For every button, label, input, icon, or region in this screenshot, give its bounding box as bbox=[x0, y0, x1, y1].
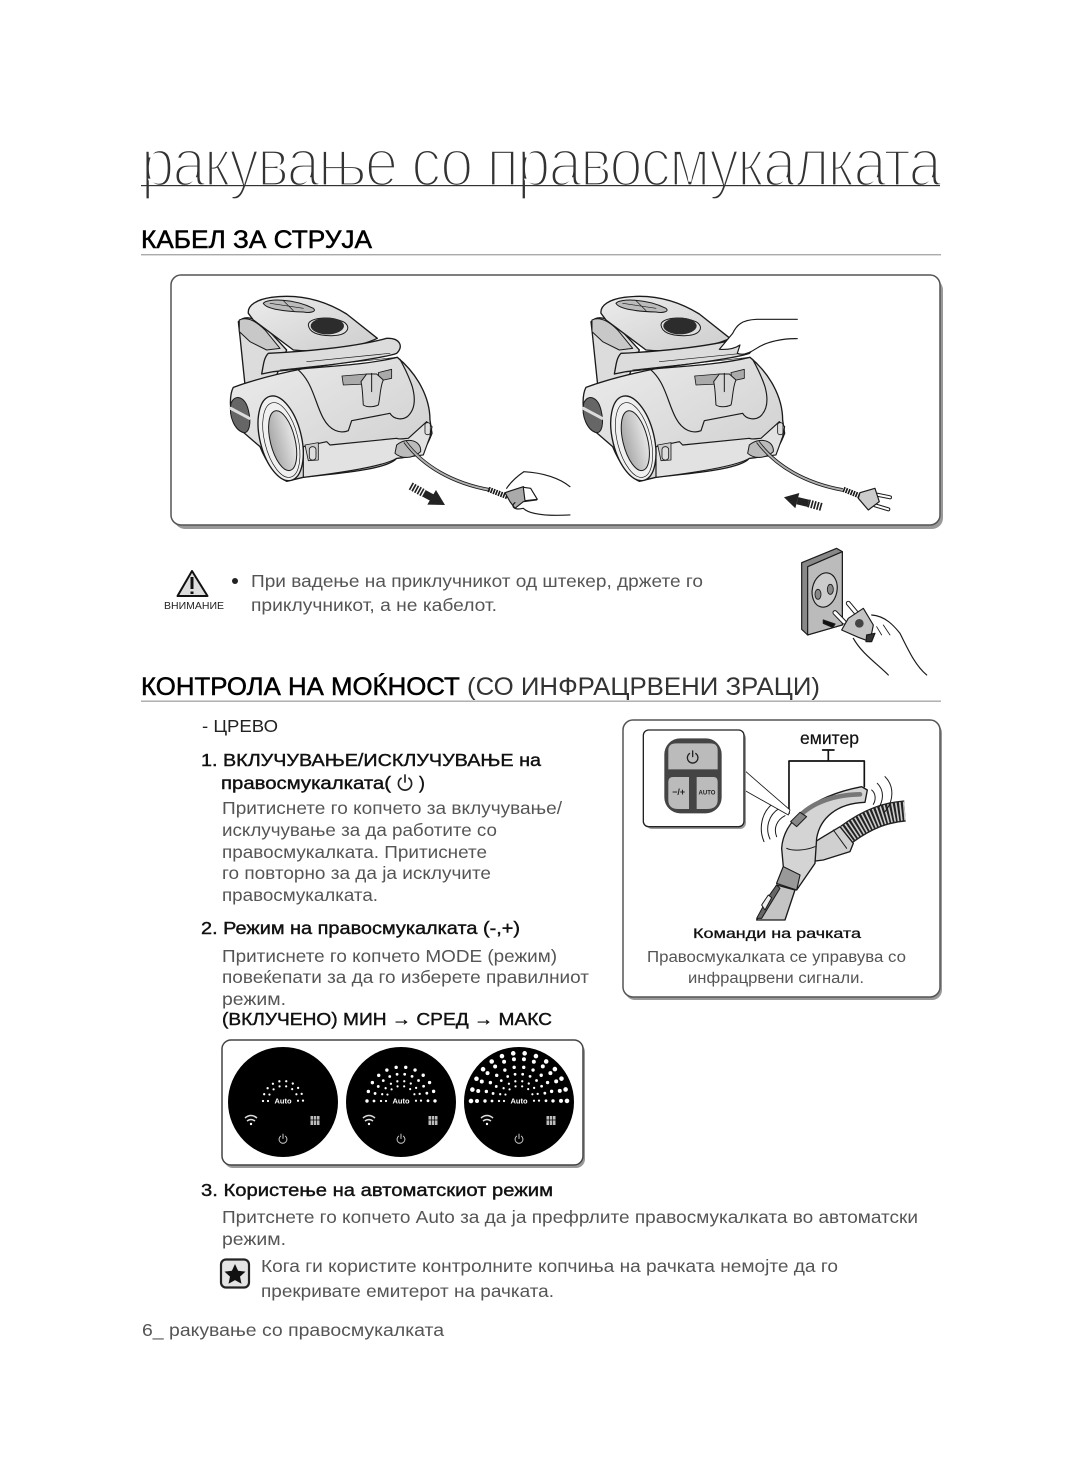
caption text: инфрацрвени сигнали. bbox=[688, 970, 864, 987]
icon: warning triangle bbox=[178, 571, 208, 596]
step 3 text: режим. bbox=[222, 1229, 286, 1249]
step 3 text bbox=[222, 1207, 918, 1249]
illustration: hose handle with emitters bbox=[744, 750, 905, 920]
panel: handle controls bbox=[623, 720, 942, 1000]
step 1 text: го повторно за да ја исклучите bbox=[222, 863, 491, 883]
text block: hose controls bbox=[201, 716, 589, 1029]
note text: Кога ги користите контролните копчиња на рачката немојте да го bbox=[261, 1256, 838, 1276]
page footer: 6_ ракување со правосмукалката bbox=[142, 1320, 444, 1341]
step 1 text: Притиснете го копчето за вклучување/ bbox=[222, 798, 562, 818]
note text bbox=[261, 1256, 838, 1301]
step 2 text: режим. bbox=[222, 989, 286, 1009]
warning text bbox=[232, 571, 703, 615]
warning text: При вадење на приклучникот од штекер, држете го bbox=[251, 571, 703, 591]
step 1 text: исклучување за да работите со bbox=[222, 820, 497, 840]
label: warning: ВНИМАНИЕ bbox=[164, 600, 224, 612]
note text: прекривате емитерот на рачката. bbox=[261, 1281, 554, 1301]
illustration: vacuum with cord pulled out bbox=[230, 296, 570, 515]
panel: suction level displays bbox=[222, 1040, 585, 1168]
step 1 text bbox=[222, 798, 562, 905]
caption text bbox=[647, 949, 906, 987]
step 1 text: правосмукалката. bbox=[222, 885, 378, 905]
display: medium: Auto bbox=[392, 1096, 410, 1106]
inset: button close-up: AUTO bbox=[699, 791, 716, 797]
illustration: hand pulling plug from wall socket bbox=[802, 548, 927, 675]
title: ракување со правосмукалката bbox=[141, 125, 942, 201]
step 1 text: правосмукалката. Притиснете bbox=[222, 842, 487, 862]
heading: power cord: КАБЕЛ ЗА СТРУЈА bbox=[141, 226, 372, 254]
step 2 text: Притиснете го копчето MODE (режим) bbox=[222, 946, 557, 966]
display: maximum: Auto bbox=[510, 1096, 528, 1106]
step 3 heading: 3. Користење на автоматскиот режим bbox=[201, 1180, 553, 1200]
display: medium bbox=[346, 1047, 456, 1157]
step 1 heading bbox=[201, 750, 541, 793]
display: minimum bbox=[228, 1047, 338, 1157]
step 3 text: Притснете го копчето Auto за да ја префрлите правосмукалката во автоматски bbox=[222, 1207, 918, 1227]
step 1 heading: ) bbox=[419, 773, 425, 793]
text block: hose controls: - ЦРЕВО bbox=[202, 716, 278, 736]
step 2 text bbox=[222, 946, 589, 1009]
display: minimum: Auto bbox=[274, 1096, 292, 1106]
warning text: приклучникот, а не кабелот. bbox=[251, 595, 497, 615]
mode sequence: (ВКЛУЧЕНО) МИН → СРЕД → МАКС bbox=[222, 1009, 552, 1029]
label: emitter: емитер bbox=[800, 728, 859, 748]
illustration: vacuum with cord rewinding bbox=[583, 296, 890, 510]
heading: power control: КОНТРОЛА НА МОЌНОСТ (СО ИНФРАЦРВЕНИ ЗРАЦИ) bbox=[141, 672, 820, 701]
step 1 heading: правосмукалката( bbox=[221, 773, 391, 793]
inset: button close-up bbox=[643, 730, 746, 829]
inset: button close-up: −/+ bbox=[672, 787, 685, 797]
step 2 heading: 2. Режим на правосмукалката (-,+) bbox=[201, 918, 520, 938]
step 2 text: повеќепати за да го изберете правилниот bbox=[222, 967, 589, 987]
icon: note star bbox=[221, 1260, 249, 1288]
step 1 heading: 1. ВКЛУЧУВАЊЕ/ИСКЛУЧУВАЊЕ на bbox=[201, 750, 541, 770]
caption text: Правосмукалката се управува со bbox=[647, 949, 906, 966]
display: maximum bbox=[464, 1047, 574, 1157]
caption heading: Команди на рачката bbox=[693, 925, 861, 941]
panel: cord illustrations bbox=[171, 275, 943, 529]
